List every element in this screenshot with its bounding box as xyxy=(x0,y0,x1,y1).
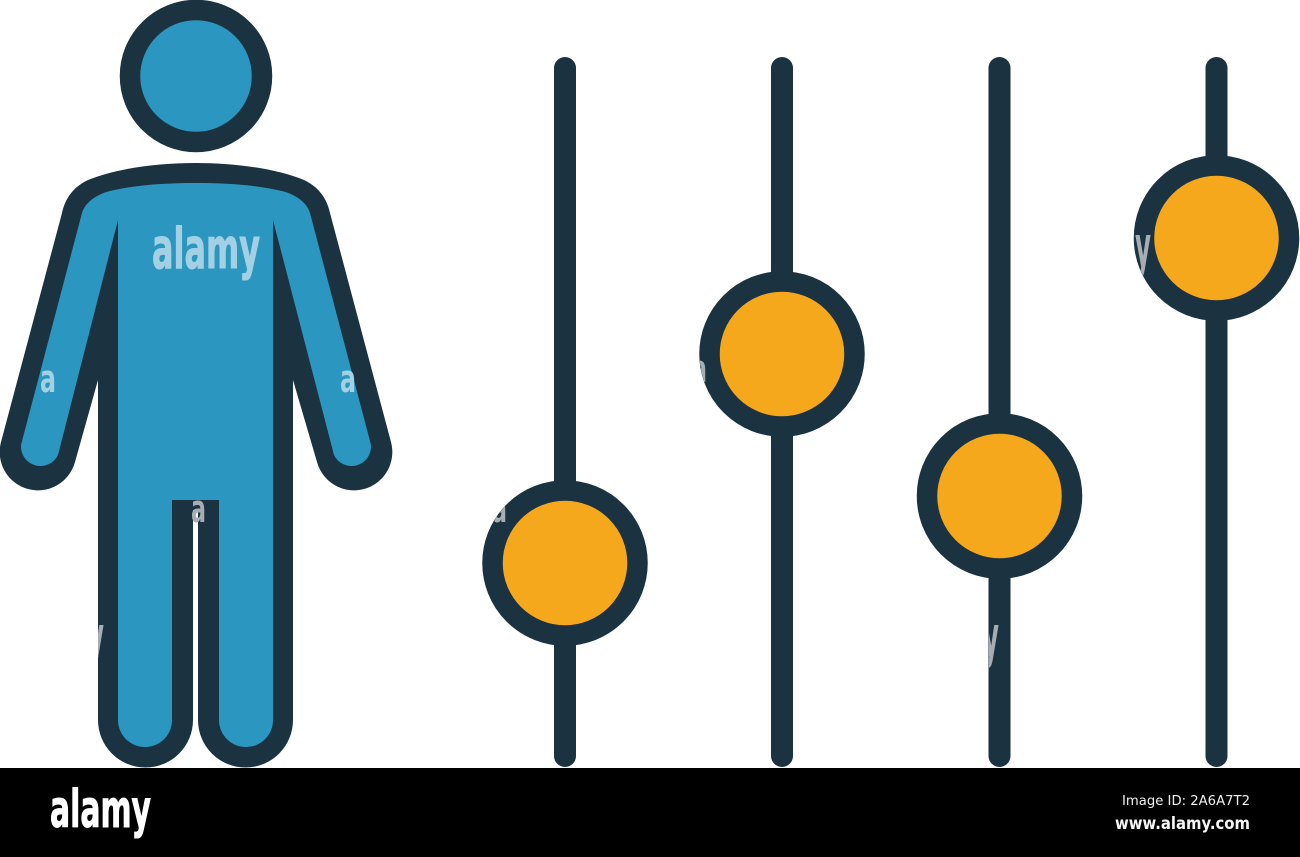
watermark: stock-photo marks: y xyxy=(983,605,999,670)
icon: person xyxy=(0,10,392,768)
watermark: stock-photo marks: a xyxy=(40,357,56,401)
footer logo: alamy xyxy=(50,780,151,840)
watermark: stock-photo marks: y xyxy=(88,605,104,670)
icon: slider 3 xyxy=(927,68,1072,756)
text: y xyxy=(1135,215,1151,280)
watermark: stock-photo marks: a xyxy=(191,487,206,531)
watermark: stock-photo marks: a xyxy=(692,347,707,391)
person body fill xyxy=(21,183,371,747)
footer bar xyxy=(0,768,1300,857)
watermark: stock-photo marks: a xyxy=(492,487,507,531)
image id: Image ID: 2A6A7T2 xyxy=(1122,793,1250,809)
icon: slider 2 xyxy=(710,68,854,756)
icon: slider 4 xyxy=(1144,68,1289,756)
icon: slider 1 xyxy=(492,68,638,756)
watermark: stock-photo marks: alamy xyxy=(152,217,260,282)
website: www.alamy.com xyxy=(1115,814,1250,833)
person head xyxy=(130,10,262,142)
person body outline xyxy=(0,163,392,768)
watermark: stock-photo marks xyxy=(40,215,1151,670)
watermark: stock-photo marks: a xyxy=(340,357,356,401)
